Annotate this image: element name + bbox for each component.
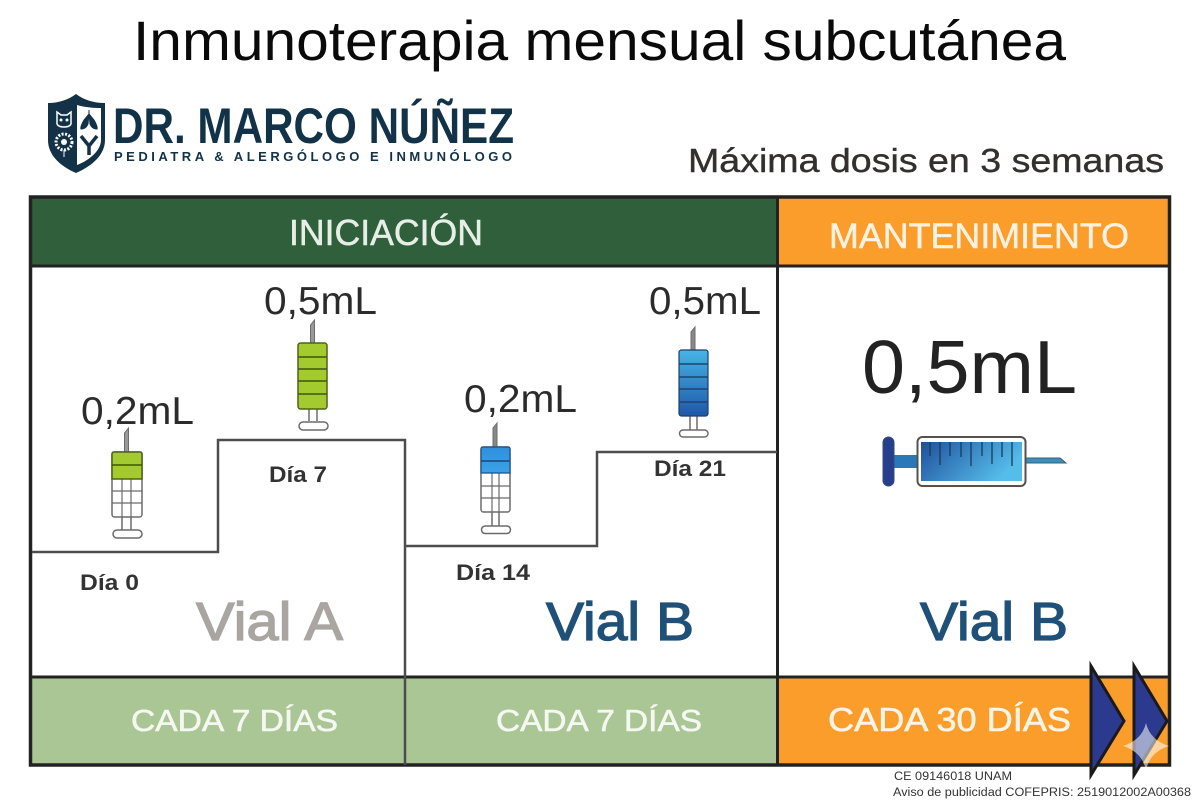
dose label: maintenance 0,5mL: 0,5mL	[862, 325, 1077, 409]
dose label: 0,2mL vial B: 0,2mL	[464, 378, 577, 421]
header: iniciación: INICIACIÓN	[289, 212, 483, 253]
day label: día 14: Día 14	[456, 560, 531, 585]
footer cell: cada 30 días	[778, 678, 1168, 764]
footer cell: cada 30 días: CADA 30 DÍAS	[828, 701, 1071, 738]
vial label: vial B: Vial B	[546, 592, 694, 652]
footer cell: cada 7 días, vial B	[405, 678, 777, 764]
logo name: DR. MARCO NÚÑEZ	[113, 98, 514, 154]
logo: Dr. Marco Núñez	[48, 94, 514, 173]
icon: sparkle	[1123, 723, 1169, 770]
header: mantenimiento: MANTENIMIENTO	[829, 217, 1129, 256]
logo subtitle: PEDIATRA & ALERGÓLOGO E INMUNÓLOGO	[114, 149, 512, 164]
day label: día 0: Día 0	[80, 570, 139, 595]
footer cell: cada 7 días, vial A	[32, 678, 405, 764]
footer cell: cada 7 días, vial A: CADA 7 DÍAS	[131, 703, 338, 738]
arrow: second chevron	[1134, 666, 1167, 775]
icon: maintenance syringe	[883, 437, 1066, 486]
footer cell: cada 7 días, vial B: CADA 7 DÍAS	[496, 703, 702, 738]
footer note: COFEPRIS: Aviso de publicidad COFEPRIS: 2519012002A00368	[893, 787, 1191, 799]
icon: syringe day 7	[298, 320, 328, 430]
header: mantenimiento	[778, 198, 1168, 266]
footer note: cédula: CE 09146018 UNAM	[894, 771, 1012, 783]
header: iniciación	[32, 198, 777, 266]
panel background	[30, 197, 1169, 765]
icon: syringe day 0	[112, 428, 142, 538]
icon: syringe day 14	[481, 423, 510, 534]
icon: shield	[48, 94, 105, 173]
dose label: 0,5mL vial B: 0,5mL	[649, 280, 761, 323]
vial label: maintenance vial B: Vial B	[920, 592, 1068, 652]
dose label: 0,2mL vial A: 0,2mL	[81, 390, 194, 433]
dose label: 0,5mL vial A: 0,5mL	[264, 280, 377, 323]
icon: syringe day 21	[679, 327, 708, 437]
table rules	[30, 197, 1170, 765]
day label: día 21: Día 21	[654, 456, 726, 481]
title: Inmunoterapia mensual subcutánea	[133, 9, 1067, 72]
subtitle: maximum dose: Máxima dosis en 3 semanas	[688, 142, 1164, 179]
step chart outline	[32, 440, 777, 765]
day label: día 7: Día 7	[269, 462, 327, 487]
arrow: first chevron	[1091, 666, 1124, 775]
vial label: vial A: Vial A	[196, 592, 343, 652]
panel: schedule table	[30, 197, 1170, 765]
